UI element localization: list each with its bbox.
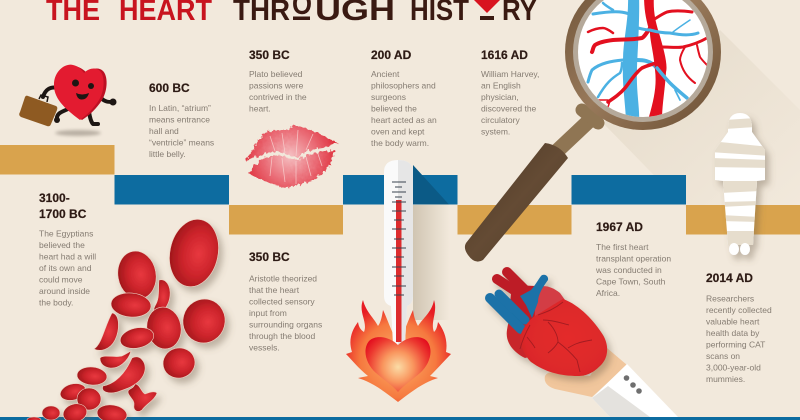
timeline entry: 200 AD: surgeons bbox=[371, 92, 406, 102]
mummy silhouette bbox=[715, 113, 765, 245]
title bbox=[46, 0, 537, 27]
timeline entry: 350 BC Plato: heart. bbox=[249, 104, 271, 114]
icon: walking heart mascot bbox=[19, 65, 117, 136]
timeline entry: 1616 AD: discovered the bbox=[481, 104, 537, 114]
timeline entry: 600 BC bbox=[149, 81, 214, 159]
timeline entry: 3100-1700 BC: heart had a will bbox=[39, 252, 96, 262]
timeline entry: 1967 AD: The first heart bbox=[596, 242, 649, 252]
timeline entry: 1616 AD bbox=[481, 48, 539, 136]
mascot ground shadow bbox=[55, 130, 101, 136]
sleeve bbox=[592, 364, 678, 417]
timeline entry: 200 AD: the body warm. bbox=[371, 138, 429, 148]
timeline entry: 2014 AD: 2014 AD bbox=[706, 271, 753, 285]
heart centre bbox=[365, 337, 431, 392]
magnifier handle bbox=[465, 110, 598, 262]
bandages bbox=[715, 118, 765, 245]
timeline entry: 1616 AD: physician, bbox=[481, 92, 519, 102]
timeline entry: 200 AD: heart acted as an bbox=[371, 115, 437, 125]
timeline entry: 350 BC Aristotle: Aristotle theorized bbox=[249, 274, 317, 284]
timeline entry: 600 BC: “ventricle” means bbox=[149, 138, 214, 148]
timeline entry: 1616 AD: circulatory bbox=[481, 115, 520, 125]
timeline entry: 2014 AD: health data by bbox=[706, 328, 760, 338]
timeline entry: 2014 AD: mummies. bbox=[706, 374, 745, 384]
timeline entry: 600 BC: means entrance bbox=[149, 114, 210, 124]
timeline entry: 1616 AD: 1616 AD bbox=[481, 48, 528, 62]
blue vessels bbox=[490, 294, 525, 329]
blue aorta bbox=[520, 275, 548, 318]
timeline entry: 3100-1700 BC: 3100- bbox=[39, 191, 70, 205]
timeline entry: 350 BC Plato: contrived in the bbox=[249, 92, 307, 102]
sleeve buttons bbox=[624, 375, 642, 394]
timeline entry: 3100-1700 BC: The Egyptians bbox=[39, 228, 93, 238]
magnifier ring bbox=[565, 0, 721, 130]
bottom blue rule bbox=[0, 417, 800, 420]
timeline entry: 3100-1700 BC: 1700 BC bbox=[39, 207, 87, 221]
timeline entry: 600 BC: little belly. bbox=[149, 149, 186, 159]
blue crossing branches bbox=[638, 20, 698, 100]
timeline entry: 1967 AD bbox=[595, 220, 671, 298]
red vessels bbox=[497, 272, 536, 326]
timeline entry: 3100-1700 BC: the body. bbox=[39, 298, 73, 308]
timeline entry: 3100-1700 BC: believed the bbox=[39, 240, 85, 250]
timeline entry: 3100-1700 BC: around inside bbox=[39, 286, 90, 296]
thermometer scale bbox=[392, 182, 406, 295]
icon: thermometer over flaming heart bbox=[346, 160, 451, 402]
timeline entry: 2014 AD: scans on bbox=[706, 351, 740, 361]
timeline entry: 2014 AD: performing CAT bbox=[706, 340, 765, 350]
timeline entry: 350 BC Plato: Plato believed bbox=[249, 69, 303, 79]
timeline entry: 1967 AD: transplant operation bbox=[596, 254, 671, 264]
heart bbox=[490, 272, 607, 376]
briefcase bbox=[19, 95, 57, 126]
timeline entry: 350 BC Aristotle bbox=[249, 250, 322, 352]
timeline entry: 350 BC Aristotle: 350 BC bbox=[249, 250, 290, 264]
icon: blood cells bbox=[27, 215, 230, 420]
blue trunk and left branches bbox=[588, 0, 657, 120]
timeline entry: 2014 AD: Researchers bbox=[706, 294, 754, 304]
timeline entry: 2014 AD: recently collected bbox=[706, 305, 772, 315]
mascot limbs bbox=[43, 87, 113, 124]
hand bbox=[545, 348, 627, 397]
timeline entry: 2014 AD bbox=[706, 271, 772, 384]
lips with jagged edge bbox=[244, 125, 338, 188]
timeline entry: 1967 AD: 1967 AD bbox=[596, 220, 643, 234]
timeline entry: 3100-1700 BC: could move bbox=[39, 274, 83, 284]
blood vessels bbox=[588, 0, 707, 120]
red trunk and branches bbox=[588, 0, 707, 120]
icon: lip print bbox=[244, 125, 338, 188]
icon: hand holding anatomical heart bbox=[490, 272, 678, 417]
timeline entry: 200 AD: 200 AD bbox=[371, 48, 412, 62]
timeline entry: 350 BC Aristotle: through the blood bbox=[249, 331, 315, 341]
timeline entry: 200 AD bbox=[371, 48, 437, 148]
thermometer shadow on blue bar bbox=[413, 165, 449, 204]
heart body bbox=[54, 65, 107, 120]
timeline entry: 1616 AD: system. bbox=[481, 126, 510, 136]
timeline entry: 350 BC Plato bbox=[249, 48, 307, 114]
timeline entry: 1967 AD: Africa. bbox=[596, 288, 620, 298]
timeline entry: 3100-1700 BC bbox=[39, 191, 96, 308]
timeline entry: 2014 AD: valuable heart bbox=[706, 316, 760, 326]
light auricle bbox=[535, 286, 565, 318]
front ventricle bbox=[520, 299, 607, 376]
timeline entry: 350 BC Aristotle: collected sensory bbox=[249, 296, 315, 306]
timeline entry: 3100-1700 BC: of its own and bbox=[39, 263, 92, 273]
timeline entry: 600 BC: hall and bbox=[149, 126, 179, 136]
heart coronary lines bbox=[520, 302, 592, 372]
timeline entry: 600 BC: In Latin, “atrium” bbox=[149, 103, 211, 113]
thermometer shadow on page bbox=[413, 205, 450, 320]
timeline entry: 2014 AD: 3,000-year-old bbox=[706, 362, 761, 372]
timeline entry: 350 BC Plato: 350 BC bbox=[249, 48, 290, 62]
timeline entry: 350 BC Plato: passions were bbox=[249, 80, 304, 90]
flames bbox=[346, 300, 451, 402]
timeline entry: 1967 AD: was conducted in bbox=[595, 265, 662, 275]
timeline bars bbox=[0, 145, 800, 234]
timeline entry: 1616 AD: an English bbox=[481, 80, 521, 90]
timeline entry: 200 AD: oven and kept bbox=[371, 126, 425, 136]
mercury column bbox=[396, 200, 402, 342]
timeline entry: 600 BC: 600 BC bbox=[149, 81, 190, 95]
timeline entry: 200 AD: philosophers and bbox=[371, 80, 436, 90]
timeline entry: 350 BC Aristotle: input from bbox=[249, 308, 287, 318]
thermometer tube bbox=[384, 160, 413, 345]
timeline entry: 1616 AD: William Harvey, bbox=[481, 69, 539, 79]
mascot face bbox=[72, 80, 94, 100]
timeline entry: 200 AD: believed the bbox=[371, 104, 417, 114]
lip crease highlights bbox=[270, 130, 322, 184]
icon: bandaged mummy bbox=[710, 113, 770, 255]
timeline entry: 1967 AD: Cape Town, South bbox=[596, 276, 666, 286]
back chamber bbox=[507, 288, 565, 358]
timeline entry: 350 BC Aristotle: surrounding organs bbox=[249, 320, 322, 330]
timeline entry: 350 BC Aristotle: that the heart bbox=[249, 285, 300, 295]
timeline entry: 200 AD: Ancient bbox=[371, 69, 400, 79]
mummy feet bbox=[729, 243, 750, 255]
magnifier long shadow bbox=[603, 30, 800, 212]
icon: magnifying glass with blood vessels bbox=[465, 0, 721, 262]
timeline entry: 350 BC Aristotle: vessels. bbox=[249, 342, 280, 352]
